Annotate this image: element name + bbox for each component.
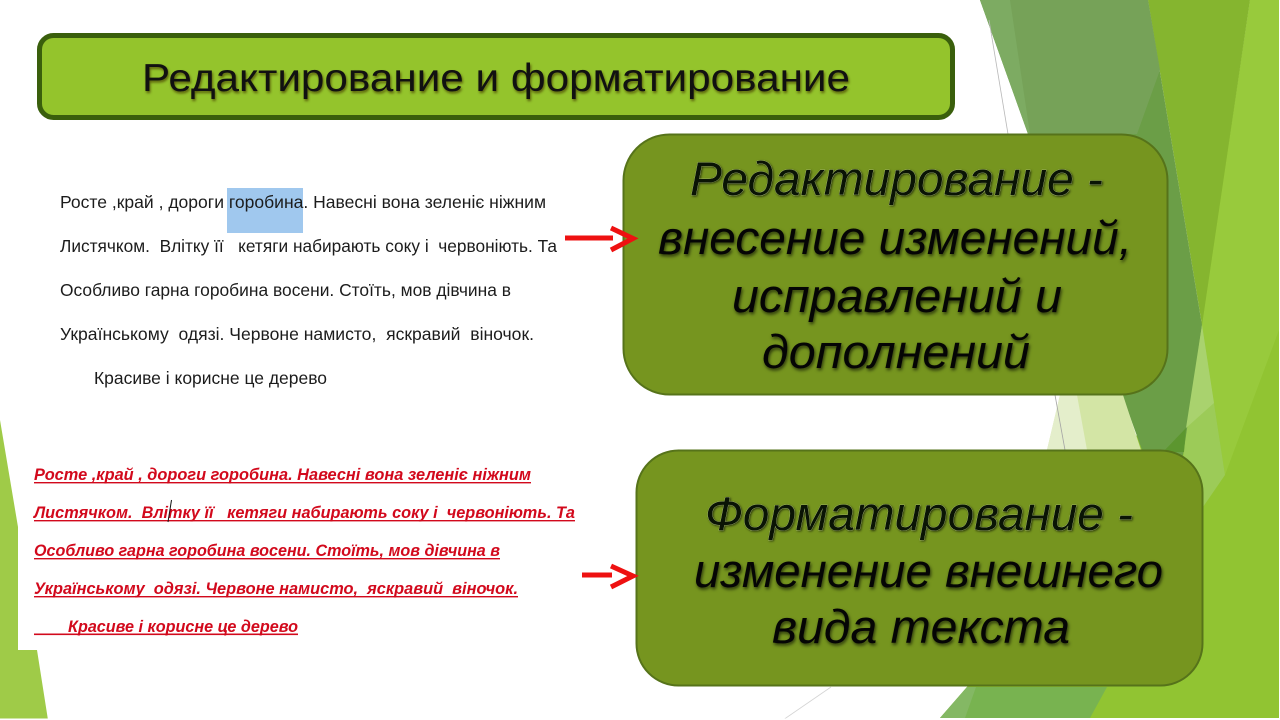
selected word highlight [227,188,303,233]
formatted red text: Красиве і корисне це дерево [68,617,298,636]
arrow: to editing panel [565,228,633,250]
editing definition text: Редактирование - [690,152,1103,205]
formatting definition text [694,487,1163,653]
arrow: to formatting panel [582,566,633,587]
panel: editing definition [624,134,1168,394]
original document text: Особливо гарна горобина восени. Стоїть, мов дівчина в [60,280,511,300]
formatting definition text: изменение внешнего [694,544,1163,597]
editing definition text: внесение изменений, [658,211,1132,264]
background: left green facet [0,420,48,720]
editing definition text: исправлений и [732,269,1062,322]
formatted red text: Росте ,край , дороги горобина. Навесні вона зеленіє ніжним [34,465,531,484]
formatting definition text: вида текста [772,600,1070,653]
original document text: Українському одязі. Червоне намисто, яскравий віночок. [60,324,534,344]
title text: Редактирование и форматирование [142,57,850,100]
editing definition text: дополнений [762,325,1030,378]
original document text: Листячком. Влітку її кетяги набирають соку і червоніють. Та [60,236,557,256]
editing definition text [658,152,1132,378]
original document text: Красиве і корисне це дерево [94,368,327,388]
formatted red text: Особливо гарна горобина восени. Стоїть, мов дівчина в [34,541,500,560]
text cursor [168,500,172,522]
background: right green facets [783,0,1279,720]
formatted red text [32,465,575,636]
original document text [60,192,557,388]
formatted red text: Українському одязі. Червоне намисто, яскравий віночок. [34,579,518,598]
panel: formatting definition [636,450,1202,686]
original document text: Росте ,край , дороги горобина. Навесні вона зеленіє ніжним [60,192,546,212]
formatting definition text: Форматирование - [705,487,1133,540]
formatted red text: Листячком. Влітку її кетяги набирають соку і червоніють. Та [32,503,575,522]
title banner [40,36,952,118]
